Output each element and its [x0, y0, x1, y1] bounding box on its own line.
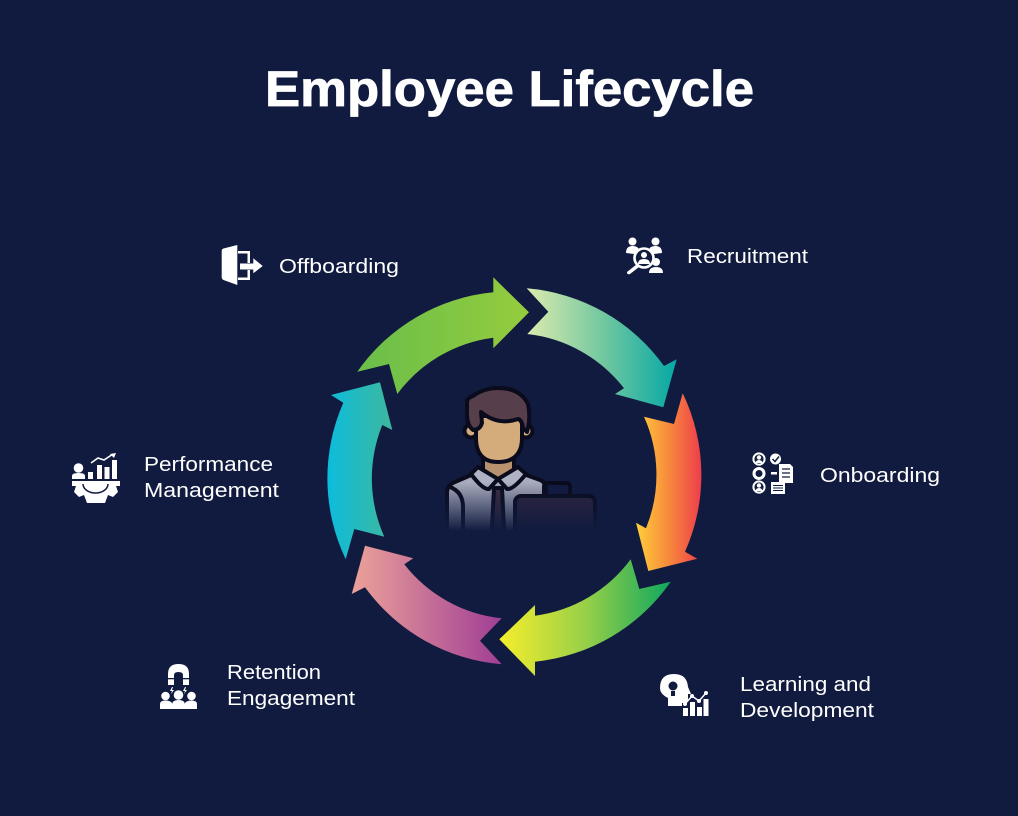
text: Retention — [227, 662, 321, 684]
arrow: offboarding to recruitment — [357, 277, 529, 394]
icon: gear with growth chart — [72, 453, 120, 503]
hair — [467, 388, 529, 432]
label: performance management: Management — [144, 480, 279, 502]
label: offboarding — [222, 245, 399, 285]
arrow: recruitment to onboarding — [527, 288, 677, 407]
arrow: onboarding to learning — [636, 393, 701, 571]
label: learning and development: Development — [740, 700, 875, 722]
icon: recruitment search — [626, 238, 663, 274]
text: Onboarding — [820, 465, 940, 487]
face — [476, 416, 522, 462]
label: performance management — [72, 453, 279, 503]
neck — [483, 452, 514, 480]
torso — [447, 472, 546, 548]
briefcase handle — [544, 483, 570, 495]
title: Employee Lifecycle — [265, 61, 754, 117]
cycle diagram — [327, 277, 701, 676]
text: Learning and — [740, 674, 871, 696]
arrow: performance to offboarding — [327, 382, 392, 559]
ears — [464, 424, 478, 438]
fade to background — [438, 482, 604, 554]
label: recruitment — [626, 238, 808, 274]
briefcase — [515, 496, 595, 536]
label: learning and development — [660, 674, 875, 722]
text: Offboarding — [279, 256, 399, 278]
label: retention engagement: Engagement — [227, 688, 355, 710]
icon: exit door — [222, 245, 263, 285]
label: retention engagement — [160, 662, 355, 710]
icon: magnet attracting people — [160, 664, 197, 709]
icon: onboarding documents — [753, 453, 793, 494]
text: Recruitment — [687, 246, 808, 268]
sleeve line — [450, 487, 463, 548]
text: Performance — [144, 454, 273, 476]
icon: employee with briefcase — [438, 388, 604, 554]
tie — [491, 488, 505, 548]
arrow: learning to retention — [499, 559, 671, 676]
collar — [471, 467, 498, 489]
icon: head with bulb and bar chart — [660, 674, 708, 716]
label: onboarding — [753, 453, 940, 494]
arrow: retention to performance — [352, 546, 502, 664]
